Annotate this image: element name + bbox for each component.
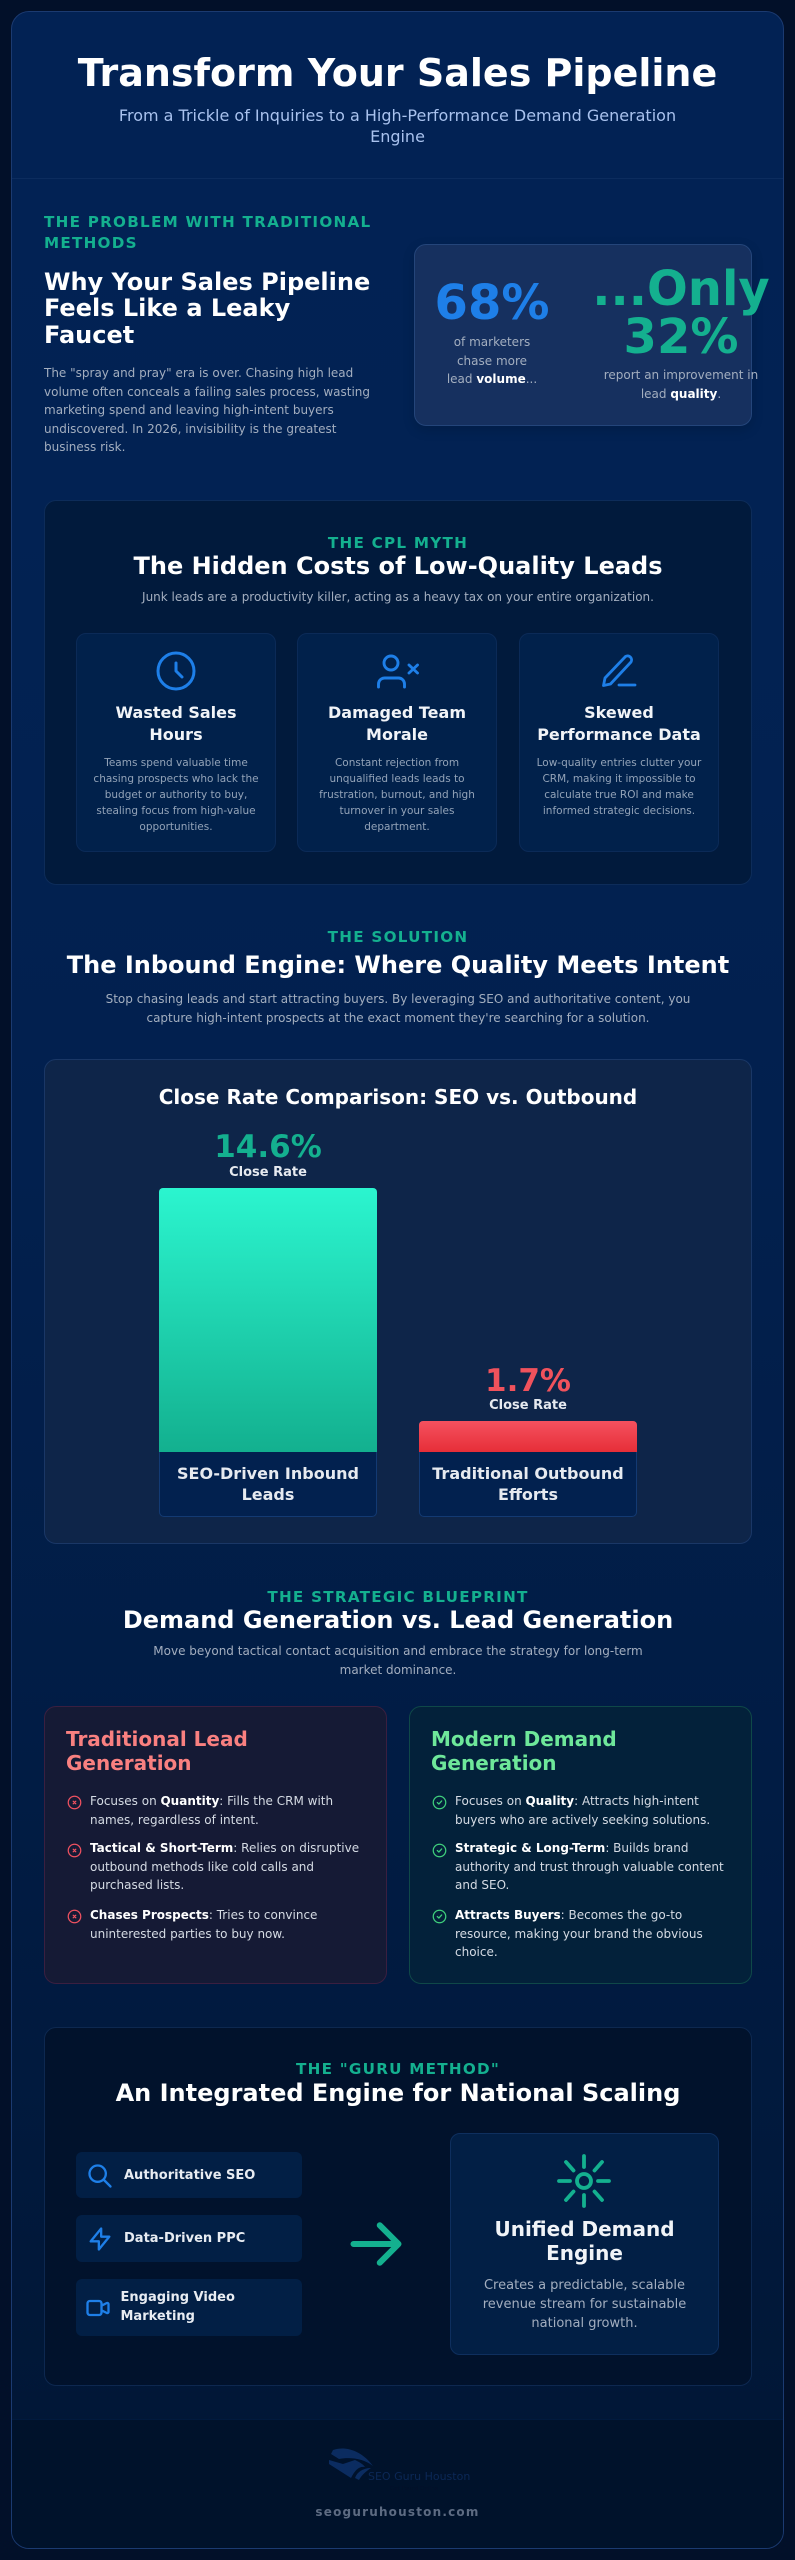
website: seoguruhouston.com (315, 2505, 480, 2519)
caption: lead quality. (641, 386, 721, 400)
item text (90, 1841, 359, 1892)
panel: hidden costs (44, 500, 752, 885)
value: ...Only (592, 261, 770, 317)
caption (447, 335, 537, 386)
subtitle (119, 106, 676, 146)
icon: check circle (432, 1908, 446, 1924)
logo name: SEO Guru Houston (368, 2470, 470, 2483)
problem paragraph: volume often conceals a failing sales process, wasting (44, 384, 370, 398)
heading: An Integrated Engine for National Scaling (116, 2079, 680, 2107)
title: Engine (546, 2241, 623, 2265)
icon: check circle (432, 1796, 446, 1810)
item text: Focuses on Quality: Attracts high-intent (455, 1794, 699, 1808)
eyebrow: THE STRATEGIC BLUEPRINT (267, 1588, 529, 1606)
card title: Morale (366, 724, 428, 744)
item text: Attracts Buyers: Becomes the go-to (455, 1908, 682, 1922)
subtitle: From a Trickle of Inquiries to a High-Performance Demand Generation (119, 106, 676, 125)
title: Transform Your Sales Pipeline (78, 51, 717, 95)
intro: Stop chasing leads and start attracting buyers. By leveraging SEO and authoritative content, you (106, 992, 690, 1006)
problem eyebrow (44, 212, 371, 252)
card text: calculate true ROI and make (544, 789, 694, 801)
intro: capture high-intent prospects at the exact moment they're searching for a solution. (146, 1010, 650, 1024)
item label: Marketing (120, 2308, 195, 2324)
problem heading (44, 268, 370, 349)
card text: chasing prospects who lack the (93, 773, 259, 785)
card title (328, 703, 466, 744)
bar name: Leads (242, 1484, 294, 1504)
icon: check circle (432, 1842, 446, 1858)
card title (115, 703, 237, 744)
caption (604, 368, 758, 400)
value: 32% (624, 309, 738, 365)
card text (319, 757, 475, 833)
icon: clock (156, 652, 196, 690)
card text: stealing focus from high-value (96, 805, 256, 817)
item text: Chases Prospects: Tries to convince (90, 1908, 317, 1922)
card: wasted sales hours (76, 633, 276, 852)
item text: uninterested parties to buy now. (90, 1926, 285, 1940)
item text: outbound methods like cold calls and (90, 1860, 314, 1874)
item: quantity (68, 1794, 333, 1826)
footer (12, 2419, 783, 2548)
intro: Junk leads are a productivity killer, acting as a heavy tax on your entire organization. (142, 590, 654, 604)
header (12, 12, 783, 179)
logo tagline: Get Found Online (390, 2486, 438, 2492)
item label: Authoritative SEO (124, 2168, 255, 2182)
card: skewed performance data (519, 633, 719, 852)
panel title: Modern Demand (431, 1727, 617, 1751)
title: Unified Demand (494, 2217, 675, 2241)
problem paragraph: marketing spend and leaving high-intent buyers (44, 403, 334, 417)
card text: informed strategic decisions. (543, 805, 695, 817)
eyebrow: THE SOLUTION (328, 928, 468, 946)
text (451, 2277, 718, 2334)
intro (153, 1644, 643, 1676)
intro: market dominance. (340, 1662, 456, 1676)
panel title (431, 1727, 617, 1775)
bar name (419, 1452, 637, 1517)
item label (120, 2289, 235, 2326)
icon: spark (556, 2153, 612, 2209)
item text: names, regardless of intent. (90, 1812, 259, 1826)
blueprint heading block (123, 1588, 673, 1676)
bar: SEO (159, 1129, 377, 1517)
solution heading block (66, 928, 729, 1024)
item: SEO (76, 2152, 302, 2198)
item: chases (68, 1908, 317, 1940)
item text: Tactical & Short-Term: Relies on disruptive (90, 1841, 359, 1855)
card: damaged team morale (297, 633, 497, 852)
icon: x circle (68, 1796, 82, 1810)
item text (90, 1794, 333, 1826)
chart title: Close Rate Comparison: SEO vs. Outbound (159, 1085, 637, 1109)
panel title: Traditional Lead (66, 1727, 248, 1751)
problem paragraph: undiscovered. In 2026, invisibility is the greatest (44, 422, 336, 436)
item text: resource, making your brand the obvious (455, 1926, 703, 1940)
intro (106, 992, 690, 1024)
item: strategic (432, 1841, 724, 1892)
card text: department. (364, 821, 430, 833)
item label: Data-Driven PPC (124, 2230, 245, 2246)
intro: Move beyond tactical contact acquisition and embrace the strategy for long-term (153, 1644, 643, 1658)
card text: Constant rejection from (335, 757, 459, 769)
bar name: SEO-Driven Inbound (177, 1464, 359, 1482)
item text (455, 1906, 703, 1962)
eyebrow: THE CPL MYTH (328, 534, 468, 552)
bar name: Efforts (498, 1484, 558, 1504)
icon: x circle (68, 1910, 82, 1924)
panel: unified demand engine (450, 2133, 719, 2355)
arrow (330, 2199, 420, 2289)
item text (90, 1908, 317, 1940)
text: Creates a predictable, scalable (484, 2278, 685, 2293)
eyebrow: THE "GURU METHOD" (296, 2060, 500, 2078)
item text: Strategic & Long-Term: Builds brand (455, 1841, 688, 1855)
card title: Damaged Team (328, 703, 466, 722)
item: video (76, 2279, 302, 2336)
panel title: Generation (66, 1751, 192, 1775)
card title (537, 703, 701, 744)
problem heading: Feels Like a Leaky (44, 294, 290, 322)
heading: The Inbound Engine: Where Quality Meets Intent (67, 951, 729, 979)
rate label: Close Rate (489, 1398, 567, 1413)
problem paragraph (44, 366, 370, 454)
icon: search (86, 2162, 114, 2190)
value: 1.7% (485, 1363, 571, 1399)
card text: budget or authority to buy, (105, 789, 247, 801)
text: national growth. (531, 2316, 638, 2331)
bar name: Traditional Outbound (432, 1464, 624, 1482)
logo (325, 2440, 475, 2495)
item: quality (432, 1794, 710, 1826)
panel: bar chart close rate (44, 1059, 752, 1544)
card text: frustration, burnout, and high (319, 789, 475, 801)
value: 14.6% (214, 1129, 322, 1165)
icon: user with x (377, 654, 419, 688)
problem eyebrow: THE PROBLEM WITH TRADITIONAL (44, 212, 371, 230)
item text (455, 1794, 710, 1826)
panel: modern demand generation (409, 1706, 752, 1984)
caption: lead volume... (447, 372, 537, 386)
card text: turnover in your sales (340, 805, 454, 817)
card title: Performance Data (537, 724, 701, 744)
logo wing (329, 2449, 373, 2480)
icon: pen (602, 654, 636, 687)
bar fill (419, 1421, 637, 1452)
icon: x circle (68, 1844, 82, 1858)
card text: unqualified leads leads to (329, 773, 465, 785)
item: PPC (76, 2215, 302, 2262)
caption: chase more (457, 354, 527, 368)
value (592, 261, 770, 365)
caption: report an improvement in (604, 368, 758, 382)
bar: outbound (419, 1363, 637, 1517)
panel: traditional lead generation (44, 1706, 387, 1984)
problem heading: Why Your Sales Pipeline (44, 268, 370, 296)
panel title (66, 1727, 248, 1775)
caption: of marketers (454, 335, 530, 349)
card text: Low-quality entries clutter your (537, 757, 701, 769)
problem paragraph: The "spray and pray" era is over. Chasing high lead (44, 366, 353, 380)
rate label: Close Rate (229, 1165, 307, 1180)
problem heading: Faucet (44, 321, 134, 349)
heading: Demand Generation vs. Lead Generation (123, 1606, 673, 1634)
panel title: Generation (431, 1751, 557, 1775)
item label: Engaging Video (120, 2290, 235, 2305)
subtitle: Engine (370, 127, 425, 146)
panel: guru method (44, 2027, 752, 2386)
problem eyebrow: METHODS (44, 234, 138, 252)
icon: video (84, 2294, 112, 2322)
stat panel (414, 244, 752, 426)
problem paragraph: business risk. (44, 440, 125, 454)
item: attracts (431, 1906, 731, 1962)
item text: purchased lists. (90, 1878, 184, 1892)
problem text block (44, 212, 371, 454)
card text (537, 757, 702, 817)
item text: authority and trust through valuable content (455, 1860, 724, 1874)
item text (455, 1839, 724, 1894)
stat 68% (435, 275, 549, 386)
bar fill (159, 1188, 377, 1452)
value: 68% (435, 275, 549, 331)
item text: and SEO. (455, 1878, 509, 1892)
card title: Skewed (584, 703, 654, 722)
card text: Teams spend valuable time (104, 757, 248, 769)
card title: Hours (149, 724, 203, 744)
item text: choice. (455, 1945, 498, 1959)
item text: Focuses on Quantity: Fills the CRM with (90, 1794, 333, 1808)
card text (93, 757, 259, 833)
title (451, 2217, 718, 2265)
text: revenue stream for sustainable (483, 2297, 686, 2312)
item: tactical (68, 1841, 359, 1892)
stat 32% (592, 261, 770, 400)
card text: CRM, making it impossible to (542, 773, 696, 785)
bar name (159, 1452, 377, 1517)
card title: Wasted Sales (115, 703, 237, 722)
item text: buyers who are actively seeking solutions. (455, 1812, 710, 1826)
card text: opportunities. (139, 821, 213, 833)
icon: lightning (86, 2225, 114, 2253)
heading: The Hidden Costs of Low-Quality Leads (133, 552, 663, 580)
